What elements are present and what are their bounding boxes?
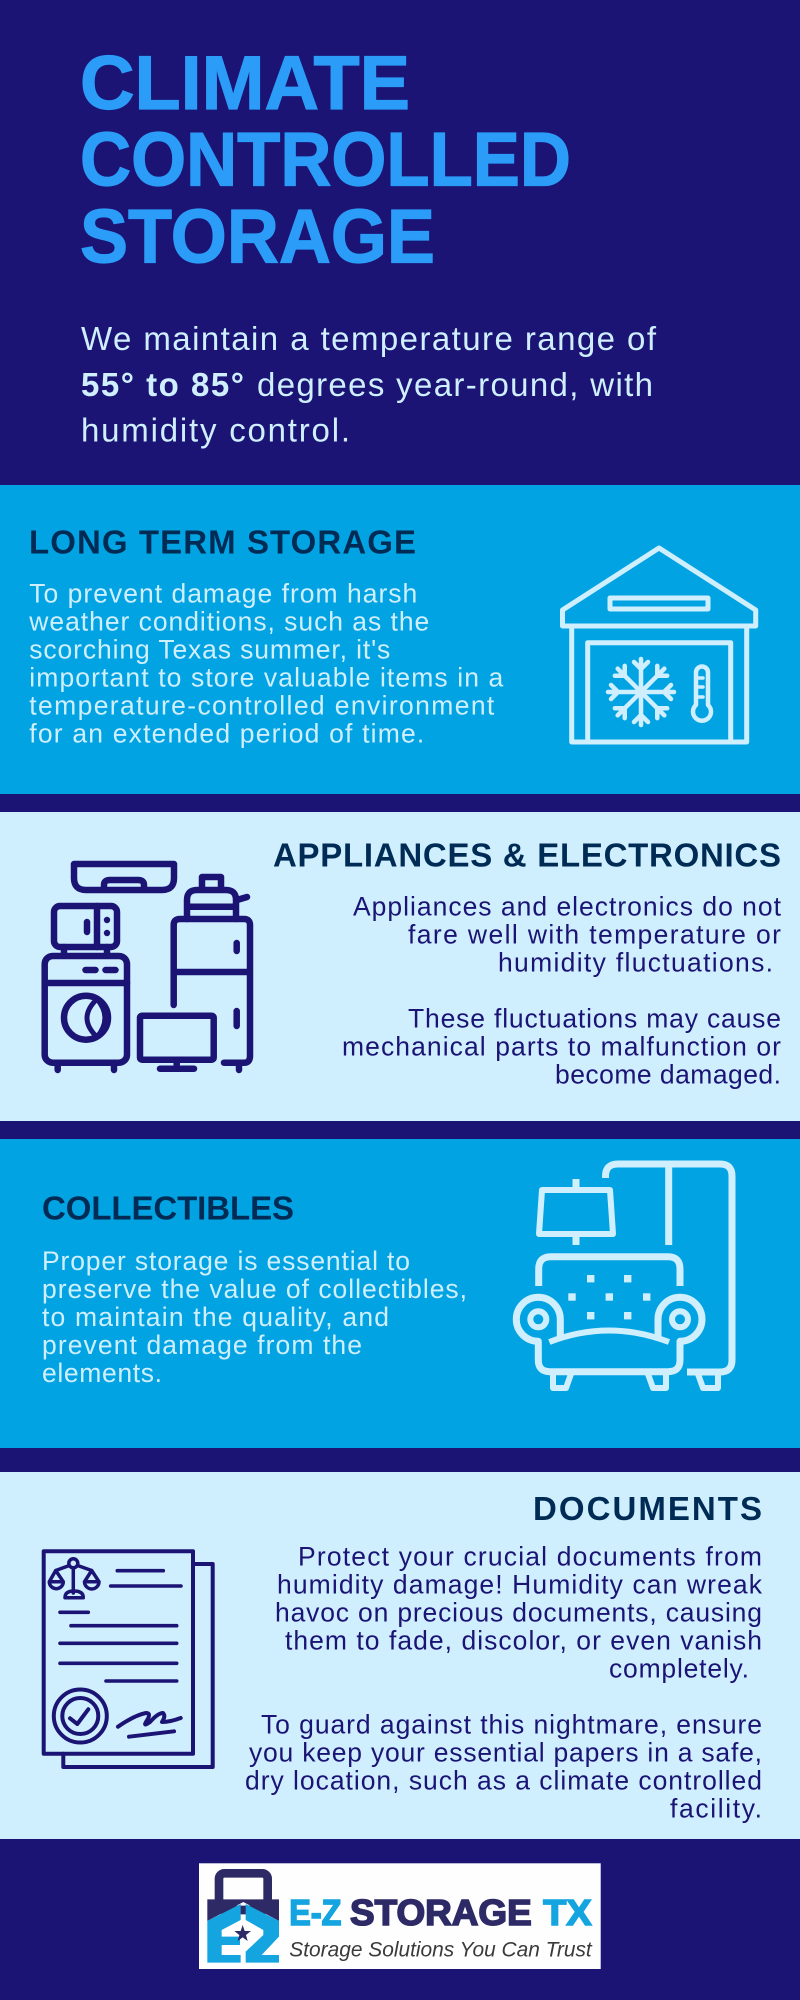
panel: long term storage bbox=[0, 485, 800, 794]
text: documents: To guard against this nightmare, ensure bbox=[261, 1709, 762, 1739]
icon: climate controlled garage bbox=[562, 548, 756, 742]
text: documents: them to fade, discolor, or even vanish bbox=[285, 1625, 762, 1655]
icon: legal document bbox=[44, 1551, 213, 1767]
intro text: 55° to 85° bbox=[81, 366, 244, 403]
text: appliances and electronics: become damaged. bbox=[555, 1059, 781, 1089]
icon: furniture bbox=[516, 1164, 732, 1388]
logo mark: padlock and house bbox=[207, 1873, 279, 1963]
text: collectibles: Proper storage is essential to bbox=[42, 1246, 410, 1276]
text: documents: humidity damage! Humidity can wreak bbox=[277, 1569, 763, 1599]
text: long term storage bbox=[28, 579, 504, 749]
icon: household appliances bbox=[45, 864, 250, 1070]
text: documents: Protect your crucial documents from bbox=[298, 1541, 762, 1571]
logo: E-Z Storage TX bbox=[199, 1863, 601, 1969]
heading: collectibles: COLLECTIBLES bbox=[42, 1189, 294, 1226]
intro text: degrees year-round, with bbox=[257, 366, 653, 403]
panel: documents bbox=[0, 1472, 800, 1839]
text: documents bbox=[245, 1541, 763, 1823]
text: appliances and electronics: mechanical parts to malfunction or bbox=[342, 1031, 781, 1061]
intro text: We maintain a temperature range of bbox=[81, 320, 657, 357]
title: STORAGE bbox=[80, 195, 435, 280]
panel: collectibles bbox=[0, 1139, 800, 1448]
text: long term storage: important to store valuable items in a bbox=[29, 663, 504, 693]
text: long term storage: temperature-controlled environment bbox=[29, 691, 495, 721]
title: CONTROLLED bbox=[80, 118, 571, 203]
text: documents: completely. bbox=[609, 1653, 749, 1683]
heading: appliances and electronics: APPLIANCES & ELECTRONICS bbox=[273, 837, 781, 874]
text: long term storage: for an extended period of time. bbox=[29, 719, 424, 749]
text: collectibles: preserve the value of collectibles, bbox=[42, 1274, 467, 1304]
text: collectibles: to maintain the quality, and bbox=[42, 1302, 389, 1332]
title bbox=[80, 41, 571, 280]
text: long term storage: weather conditions, such as the bbox=[28, 607, 429, 637]
text: collectibles: prevent damage from the bbox=[42, 1330, 362, 1360]
heading: long term storage: LONG TERM STORAGE bbox=[29, 523, 416, 560]
text: collectibles bbox=[42, 1246, 467, 1388]
logo wordmark: TX bbox=[543, 1892, 592, 1933]
text: documents: facility. bbox=[670, 1793, 762, 1823]
intro text bbox=[81, 320, 657, 449]
title: CLIMATE bbox=[80, 41, 410, 126]
text: appliances and electronics: Appliances and electronics do not bbox=[353, 891, 782, 921]
text: long term storage: To prevent damage from harsh bbox=[29, 579, 417, 609]
text: appliances and electronics: fare well with temperature or bbox=[408, 919, 781, 949]
text: collectibles: elements. bbox=[42, 1358, 162, 1388]
logo wordmark: STORAGE bbox=[350, 1892, 532, 1933]
text: appliances and electronics bbox=[342, 891, 782, 1089]
text: documents: dry location, such as a climate controlled bbox=[245, 1765, 762, 1795]
text: appliances and electronics: humidity fluctuations. bbox=[498, 947, 773, 977]
heading: documents: DOCUMENTS bbox=[533, 1490, 762, 1527]
panel: header bbox=[80, 41, 657, 449]
logo tagline: Storage Solutions You Can Trust bbox=[289, 1939, 593, 1962]
intro text: humidity control. bbox=[81, 412, 350, 449]
text: documents: you keep your essential papers in a safe, bbox=[249, 1737, 762, 1767]
panel: appliances and electronics bbox=[0, 812, 800, 1121]
text: documents: havoc on precious documents, causing bbox=[275, 1597, 762, 1627]
text: appliances and electronics: These fluctuations may cause bbox=[408, 1003, 781, 1033]
text: long term storage: scorching Texas summer, it's bbox=[29, 635, 390, 665]
logo wordmark bbox=[289, 1892, 592, 1933]
logo wordmark: E-Z bbox=[289, 1892, 341, 1933]
